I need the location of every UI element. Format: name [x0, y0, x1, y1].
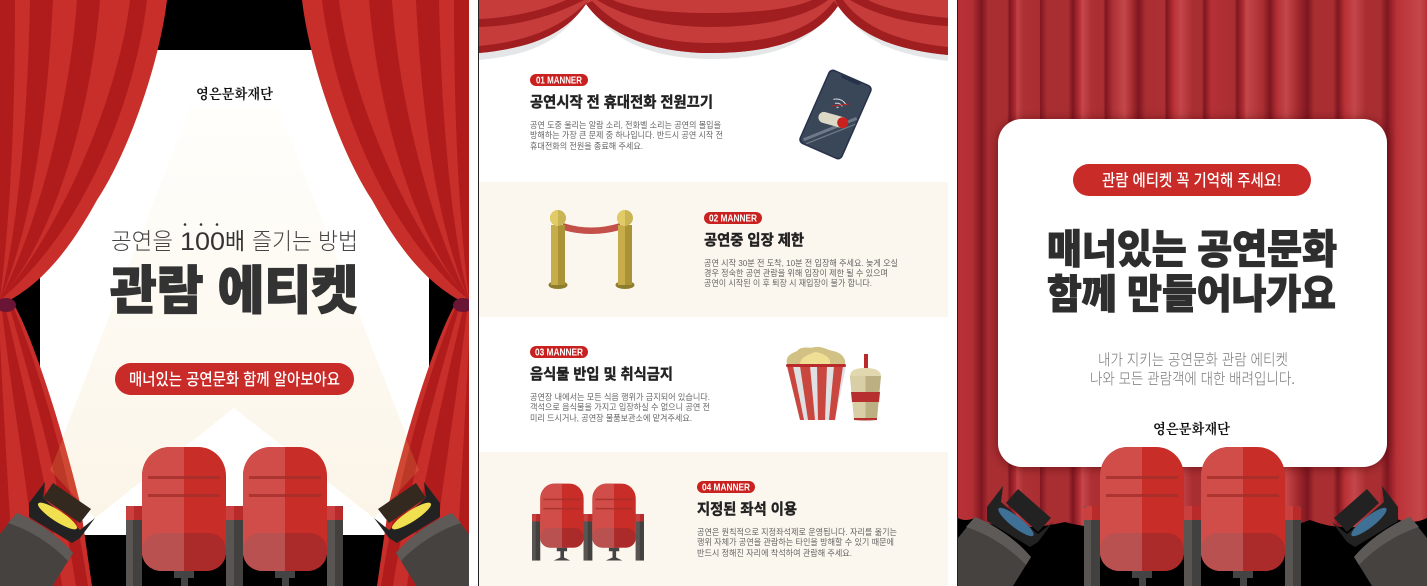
- item 03: 음식물 반입 및 취식금지: [530, 366, 673, 383]
- icon: phone: [798, 68, 873, 161]
- item 01: 공연 도중 울리는 알람 소리, 전화벨 소리는 공연의 몰입을: [530, 120, 721, 130]
- panel: closing: [957, 0, 1427, 586]
- pill: intro: 매너있는 공연문화 함께 알아보아요: [129, 370, 340, 389]
- spotlight beams: [62, 203, 406, 518]
- item 03: [530, 346, 710, 423]
- icon: popcorn and drink: [786, 347, 881, 420]
- headline: 함께 만들어나가요: [1047, 273, 1336, 317]
- icon: right spotlight: [1332, 486, 1427, 586]
- item 03: 객석으로 음식물을 가지고 입장하실 수 없으니 공연 전: [530, 402, 710, 412]
- icon: left spotlight: [958, 486, 1053, 586]
- icon: small seats: [532, 484, 644, 561]
- item 03: 미리 드시거나, 공연장 물품보관소에 맡겨주세요.: [530, 412, 692, 423]
- item 01: 방해하는 가장 큰 문제 중 하나입니다. 반드시 공연 시작 전: [530, 130, 723, 140]
- item 04: 행위 자체가 공연을 관람하는 타인을 방해할 수 있기 때문에: [697, 536, 894, 547]
- item 01: 휴대전화의 전원을 종료해 주세요.: [530, 141, 643, 151]
- icon: right spotlight: [374, 482, 469, 586]
- top valance curtain: [479, 0, 948, 61]
- backdrop curtain: [958, 0, 1427, 527]
- supporting text: [1090, 351, 1295, 388]
- item 01: [530, 74, 723, 151]
- item 02: 공연 시작 30분 전 도착, 10분 전 입장해 주세요. 늦게 오실: [704, 258, 898, 268]
- item 04: 지정된 좌석 이용: [697, 501, 797, 518]
- item 02: [704, 212, 898, 288]
- item 01: 공연시작 전 휴대전화 전원끄기: [530, 94, 713, 111]
- logo: 영은문화재단: [1153, 421, 1230, 438]
- item 02: 공연중 입장 제한: [704, 232, 804, 249]
- subtitle: 즐기는 방법: [252, 228, 358, 254]
- supporting text: 나와 모든 관람객에 대한 배려입니다.: [1090, 370, 1295, 388]
- pill: reminder: 관람 에티켓 꼭 기억해 주세요!: [1102, 171, 1281, 190]
- subtitle: 공연을: [111, 228, 173, 254]
- pill: intro: [115, 363, 354, 395]
- logo: 영은문화재단: [196, 86, 273, 103]
- item 04: 반드시 정해진 자리에 착석하여 관람해 주세요.: [697, 547, 852, 558]
- headline: [1047, 228, 1337, 317]
- item 01: 01 MANNER: [536, 76, 583, 87]
- seats: [126, 447, 343, 586]
- title: 관람 에티켓: [110, 263, 358, 321]
- panel: manners: [478, 0, 948, 586]
- right curtain: [302, 0, 473, 586]
- seats: [1084, 447, 1301, 586]
- item 03: 03 MANNER: [535, 348, 584, 359]
- icon: stanchions: [548, 210, 634, 289]
- item 02: 02 MANNER: [709, 214, 758, 225]
- stage screen: [40, 50, 429, 535]
- supporting text: 내가 지키는 공연문화 관람 에티켓: [1098, 351, 1288, 369]
- subtitle: 100: [180, 228, 225, 256]
- panel: cover: [0, 0, 473, 586]
- item 04: [697, 481, 897, 558]
- subtitle: [112, 230, 355, 252]
- item 03: 공연장 내에서는 모든 식음 행위가 금지되어 있습니다.: [530, 391, 710, 402]
- message card: [998, 119, 1387, 467]
- item 04: 04 MANNER: [702, 483, 751, 494]
- subtitle: 배: [225, 228, 245, 254]
- emphasis dots: [184, 223, 218, 226]
- pill: reminder: [1073, 164, 1311, 196]
- row background 02: [479, 182, 948, 317]
- item 02: 공연이 시작된 이 후 퇴장 시 재입장이 불가 합니다.: [704, 277, 872, 288]
- item 02: 경우 정숙한 공연 관람을 위해 입장이 제한 될 수 있으며: [704, 267, 888, 278]
- headline: 매너있는 공연문화: [1047, 228, 1337, 272]
- row background 04: [479, 452, 948, 586]
- item 04: 공연은 원칙적으로 지정좌석제로 운영됩니다. 자리를 옮기는: [697, 526, 897, 537]
- left curtain: [0, 0, 167, 586]
- icon: left spotlight: [0, 482, 95, 586]
